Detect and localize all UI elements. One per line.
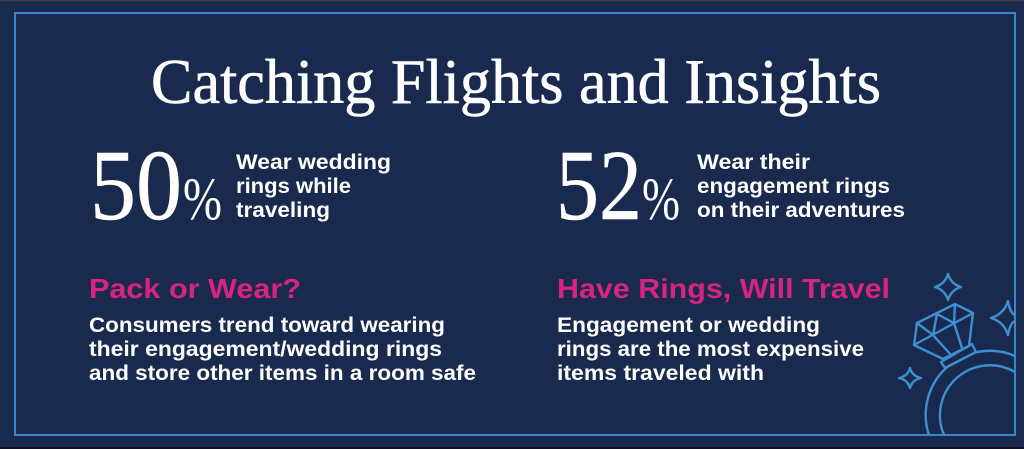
stat: 52 percent: 52 [556, 129, 642, 241]
block: Pack or Wear: their engagement/wedding rings [89, 338, 442, 361]
block: Pack or Wear [89, 273, 476, 385]
block: Pack or Wear: Consumers trend toward wearing [89, 314, 445, 337]
block: Have Rings, Will Travel: rings are the most expensive [557, 338, 864, 361]
stat: 50 percent: % [183, 166, 222, 232]
stat: 52 percent: on their adventures [697, 199, 905, 222]
stat: 52 percent: % [642, 166, 680, 232]
block: Have Rings, Will Travel: Engagement or wedding [557, 314, 820, 337]
block: Pack or Wear: Pack or Wear? [89, 273, 301, 304]
block: Have Rings, Will Travel: Have Rings, Will Travel [557, 273, 890, 304]
stat: 50 percent: traveling [236, 199, 330, 222]
stat: 50 percent: rings while [236, 175, 351, 198]
stat: 50 percent: 50 [90, 129, 182, 241]
title: Catching Flights and Insights [151, 46, 881, 117]
stat: 50 percent: Wear wedding [236, 151, 391, 174]
stat: 50 percent [90, 129, 391, 241]
stat: 52 percent [556, 129, 905, 241]
block: Have Rings, Will Travel [557, 273, 890, 385]
stat: 52 percent: engagement rings [697, 175, 890, 198]
icon: diamond ring [899, 274, 1015, 435]
block: Have Rings, Will Travel: items traveled with [557, 362, 764, 385]
block: Pack or Wear: and store other items in a room safe [89, 362, 476, 385]
stat: 52 percent: Wear their [697, 151, 810, 174]
